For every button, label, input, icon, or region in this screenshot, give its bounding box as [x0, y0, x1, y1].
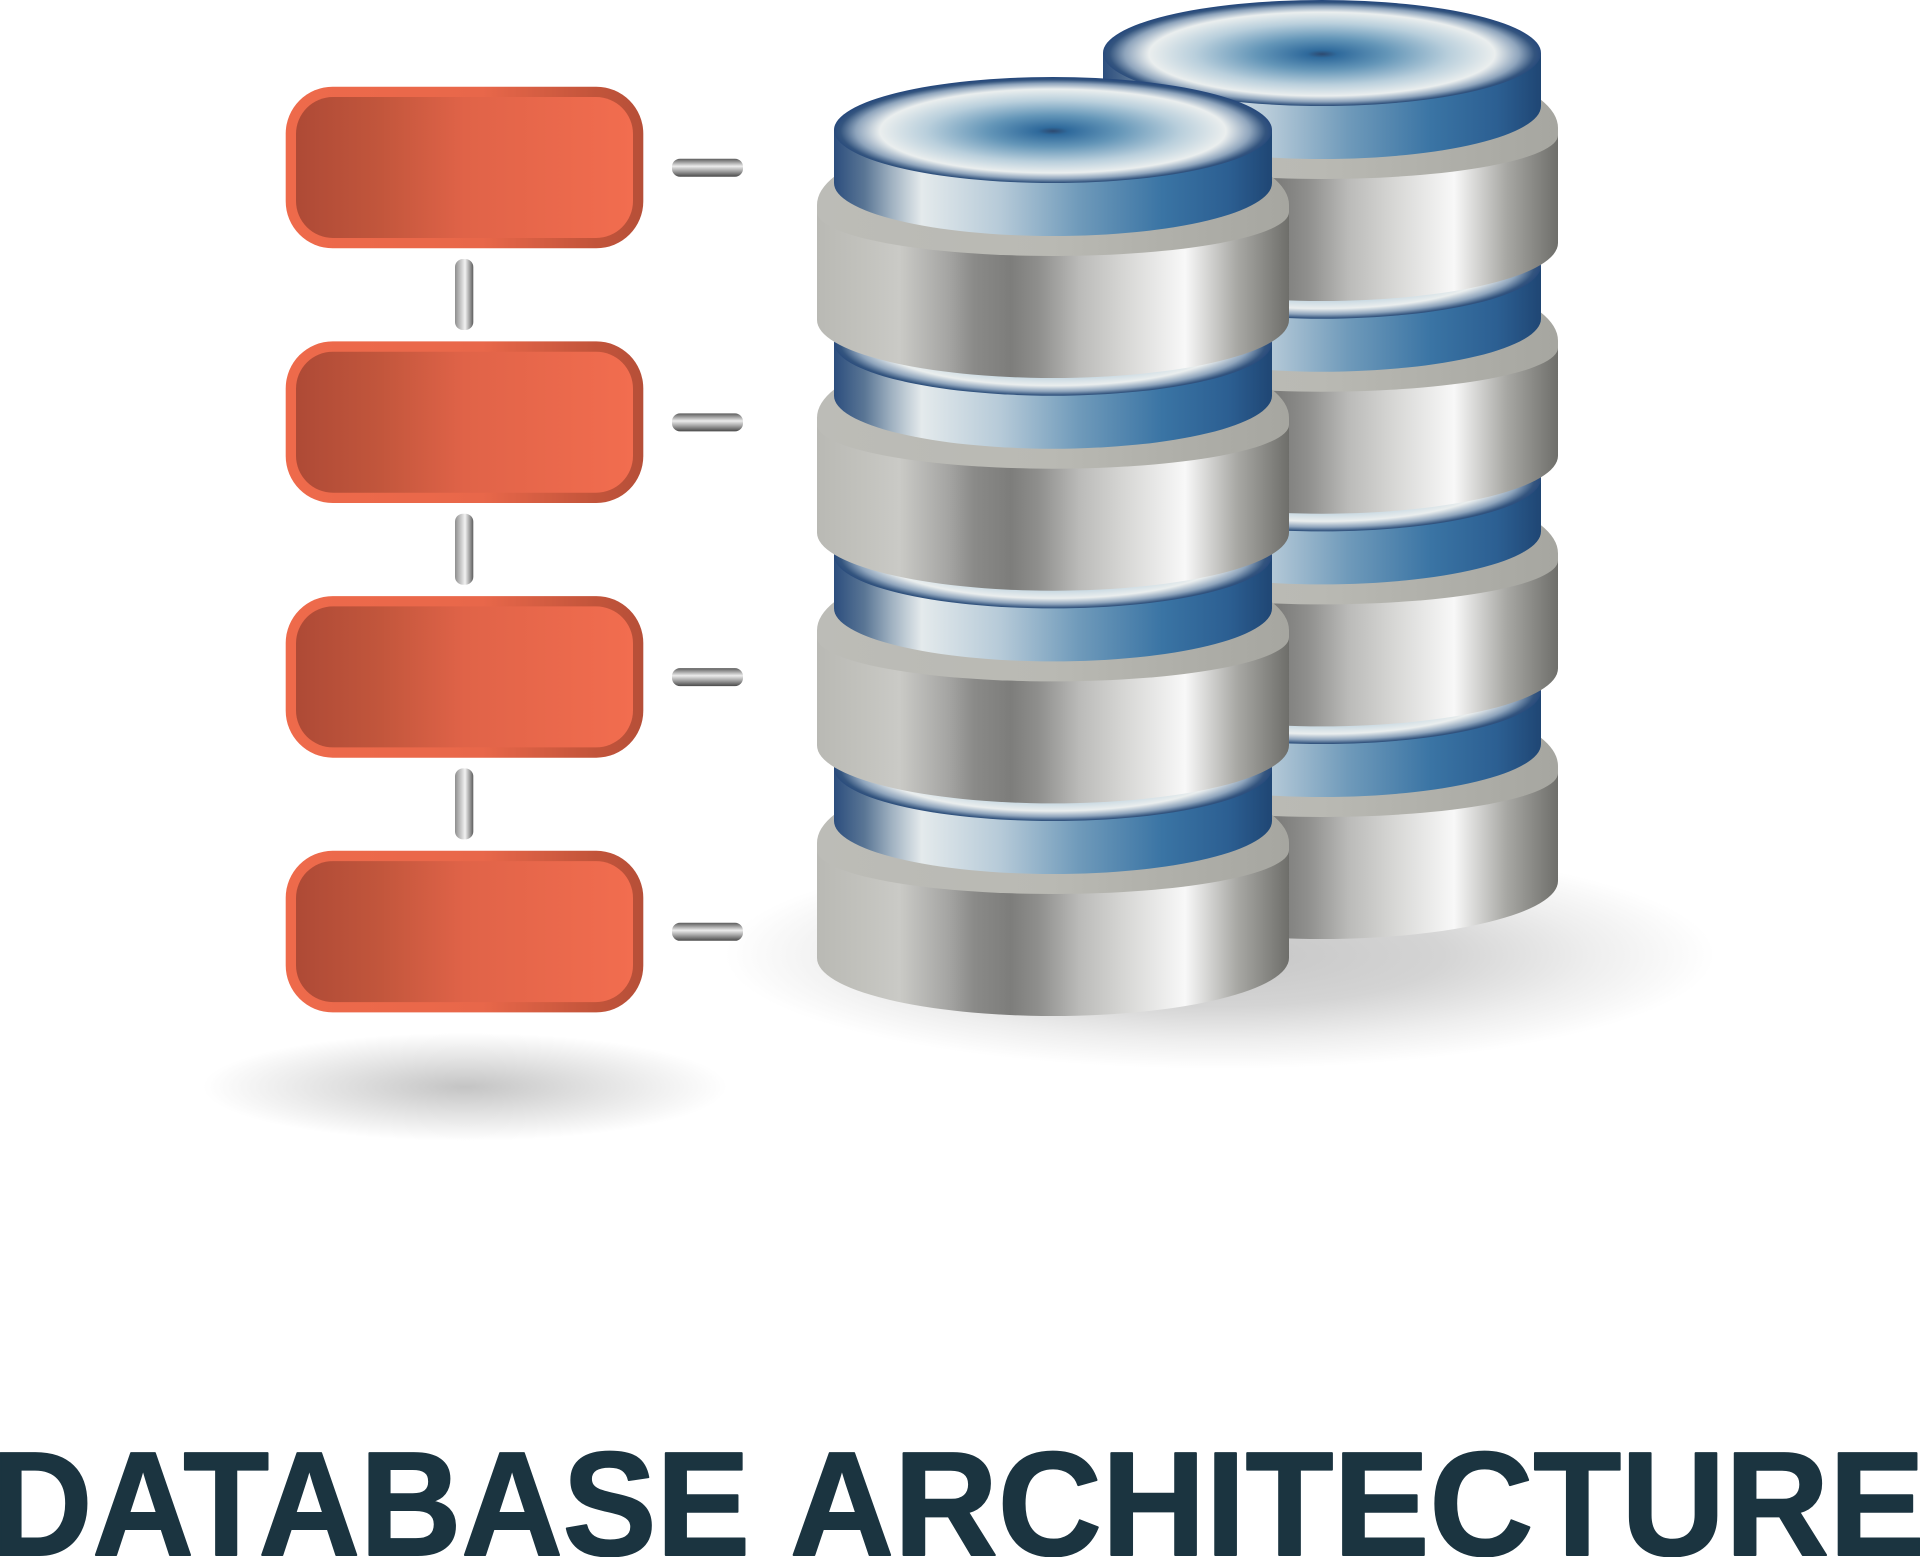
connector: box 2 to box 3 [455, 514, 473, 585]
connector: box 3 to database [672, 668, 743, 686]
connector: box 4 to database [672, 923, 743, 941]
title [0, 1422, 1920, 1557]
connector: box 1 to database [672, 159, 743, 177]
database stack: back [1086, 0, 1558, 939]
schema box 4 [286, 851, 643, 1012]
schema box 2 [286, 341, 643, 503]
connector: box 3 to box 4 [455, 768, 473, 839]
schema box 1 [286, 87, 643, 248]
shadow under database stacks [725, 841, 1715, 1069]
connector: box 1 to box 2 [455, 259, 473, 330]
shadow under diagram boxes [203, 1033, 727, 1141]
connector: box 2 to database [672, 413, 743, 431]
schema box 3 [286, 596, 643, 758]
database stack: front [817, 77, 1289, 1016]
